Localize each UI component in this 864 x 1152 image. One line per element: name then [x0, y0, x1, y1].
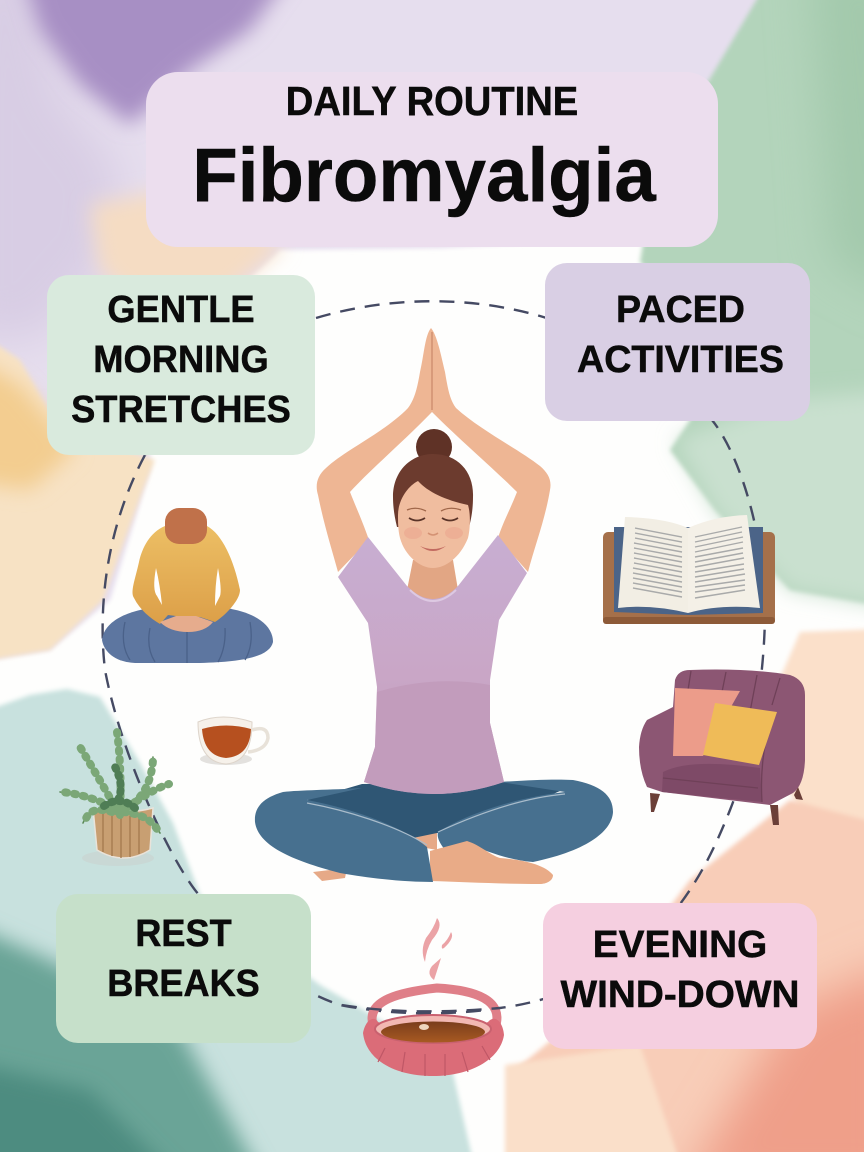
- panel: rest breaks: REST: [135, 913, 232, 955]
- shirt: [338, 535, 527, 794]
- trousers inner: [307, 782, 567, 838]
- icon: potted plant: [60, 730, 171, 866]
- peach coral wash: [770, 628, 864, 860]
- far foot: [313, 868, 347, 881]
- panel: gentle morning stretches: MORNING: [93, 339, 269, 381]
- head: [398, 481, 470, 568]
- panel: evening wind-down: WIND-DOWN: [561, 974, 799, 1016]
- icon: open book: [603, 515, 775, 624]
- left leg: [255, 788, 433, 882]
- panel: paced activities: PACED: [616, 289, 745, 331]
- face details: [409, 518, 458, 520]
- panel: evening wind-down: [543, 903, 817, 1049]
- panel: rest breaks: BREAKS: [107, 963, 260, 1005]
- title: fibromyalgia: Fibromyalgia: [192, 133, 656, 218]
- icon: meditating figure on cushion: [102, 508, 273, 663]
- panel: rest breaks: [56, 894, 311, 1043]
- woman doing yoga: [255, 328, 613, 884]
- hair bun: [416, 429, 452, 465]
- green wash: [640, 0, 864, 610]
- panel: gentle morning stretches: [47, 275, 315, 455]
- icon: tea cup: [198, 717, 268, 765]
- panel: gentle morning stretches: STRETCHES: [71, 389, 291, 431]
- icon: armchair: [639, 670, 805, 825]
- icon: wind-down bowl: [342, 988, 504, 1076]
- main foot: [430, 841, 553, 884]
- neck: [407, 560, 458, 604]
- teal wash: [0, 689, 480, 1152]
- panel: paced activities: ACTIVITIES: [577, 339, 784, 381]
- title panel: [146, 72, 718, 247]
- lavender wash: [0, 0, 780, 665]
- panel: evening wind-down: EVENING: [593, 924, 767, 966]
- hair back: [393, 454, 473, 527]
- arms and hands: [317, 328, 551, 572]
- right leg: [438, 780, 613, 862]
- icon: steam: [423, 918, 452, 980]
- orange wash: [0, 320, 155, 665]
- panel: paced activities: [545, 263, 810, 421]
- panel: gentle morning stretches: GENTLE: [107, 289, 255, 331]
- title: daily routine: DAILY ROUTINE: [286, 78, 578, 124]
